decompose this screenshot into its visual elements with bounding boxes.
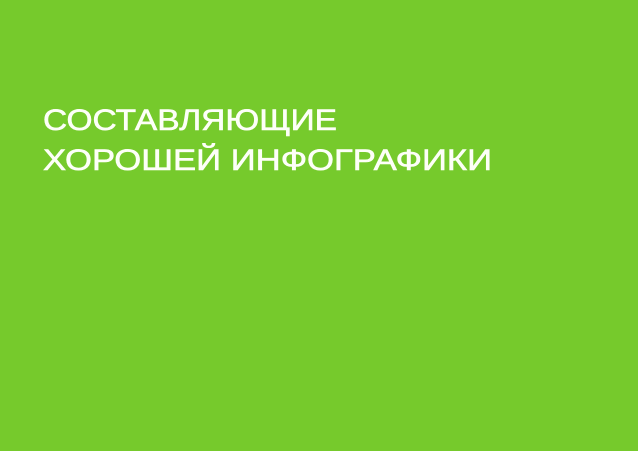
title: ХОРОШЕЙ ИНФОГРАФИКИ: [43, 143, 492, 177]
title: СОСТАВЛЯЮЩИЕ: [43, 104, 337, 137]
